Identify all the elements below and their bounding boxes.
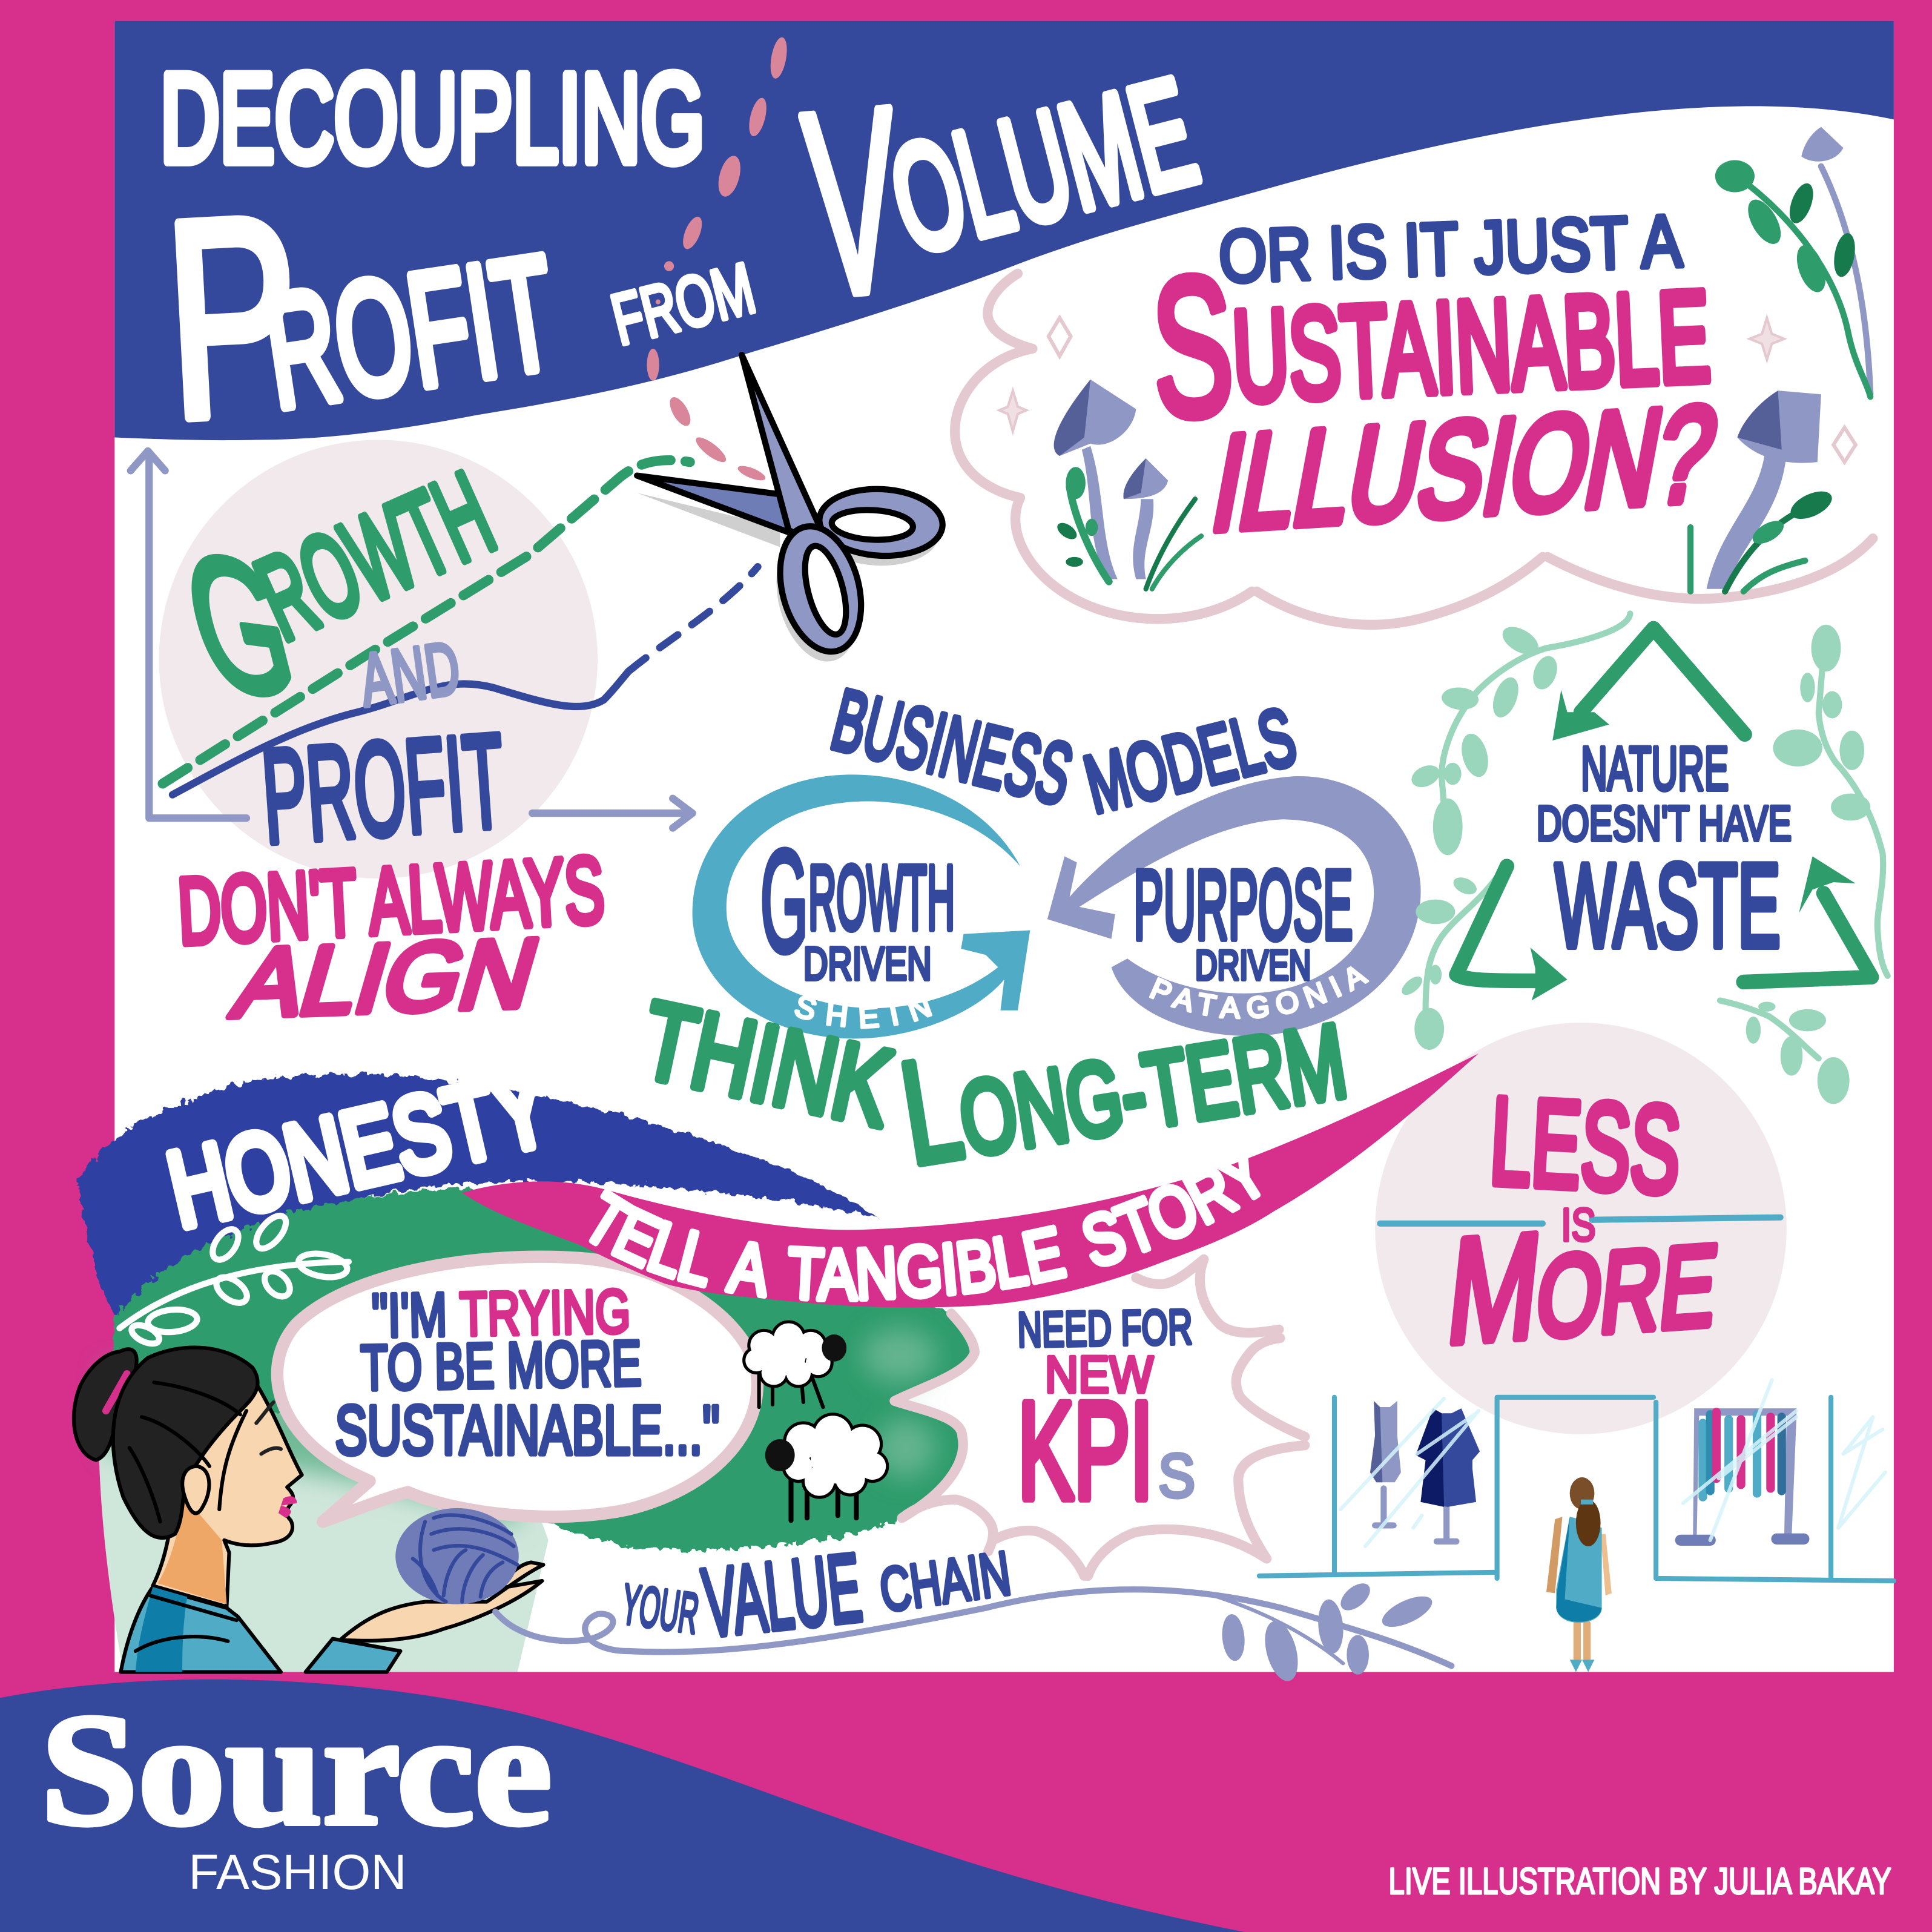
value chain thread and text — [495, 1533, 1451, 1684]
upper blade — [742, 355, 820, 537]
title text: from: FROM — [604, 248, 762, 360]
white sprig — [119, 1211, 349, 1347]
lower blade — [637, 476, 801, 532]
title text: profit: P — [159, 157, 306, 478]
ear — [182, 1466, 209, 1513]
business models heading — [823, 671, 1304, 830]
shopper figure — [1546, 1477, 1612, 1672]
title text: profit: ROFIT — [255, 223, 566, 442]
cloud outline — [955, 274, 1873, 625]
top-right plant and mushroom — [1715, 127, 1870, 397]
white main panel — [114, 21, 1894, 1672]
text: s: S — [1158, 1442, 1195, 1511]
speech text line 1: "I'M TRYING — [371, 1277, 631, 1350]
purpose-driven loop: PURPOSE — [1133, 851, 1353, 960]
text: chain: CHAIN — [875, 1538, 1015, 1625]
mannequin: fitted dress — [1370, 1401, 1401, 1525]
grass left — [1055, 467, 1201, 589]
blue top — [120, 1587, 281, 1672]
speech text line 2: TO BE MORE — [360, 1327, 642, 1404]
text: or is it just a: OR IS IT JUST A — [1218, 199, 1684, 298]
title text: decoupling: DECOUPLING — [160, 48, 705, 188]
tell a tangible story ribbon — [462, 1053, 1479, 1308]
neck and face — [153, 1377, 302, 1607]
left handle — [767, 517, 874, 661]
text: illusion?: ILLUSION? — [1202, 378, 1727, 559]
text: models: MODELS — [1076, 691, 1304, 830]
text: long-term: LONG-TERM — [891, 965, 1355, 1195]
value chain thread and text: YOUR — [618, 1572, 702, 1646]
text: driven: DRIVEN — [1195, 941, 1311, 989]
text: sustainable: S — [1148, 235, 1237, 459]
ribbon text: TELL A TANGIBLE STORY — [589, 1158, 1261, 1302]
text: think: THINK — [632, 978, 902, 1149]
speech text line 3: SUSTAINABLE..." — [335, 1392, 719, 1469]
hair strands — [130, 1382, 246, 1522]
text: new: NEW — [1045, 1347, 1153, 1404]
glass reflections — [1340, 1380, 1885, 1546]
text: need for: NEED FOR — [1017, 1299, 1193, 1357]
honesty text: HONESTY — [159, 1048, 559, 1250]
wordmark: source: Source — [41, 1681, 552, 1859]
footer wave — [0, 1680, 1244, 1932]
woman with yarn — [74, 1348, 543, 1672]
yarn ball — [395, 1508, 519, 1604]
mushroom large left — [1054, 380, 1136, 579]
text: value: VALUE — [698, 1533, 866, 1657]
lavender swoosh arrow — [1047, 776, 1421, 1036]
wordmark: fashion: FASHION — [188, 1845, 407, 1900]
sparkles — [999, 318, 1856, 462]
green recycle arrows — [1456, 628, 1871, 1000]
text: business: BUSINESS — [823, 671, 1081, 823]
title text: volume: V — [795, 53, 912, 351]
text: more: MORE — [1441, 1190, 1726, 1375]
sheep — [745, 1324, 886, 1520]
need for new kpis burst bubble — [894, 1259, 1305, 1576]
arrow to business models — [532, 799, 693, 828]
text: shein: SHEIN — [794, 995, 932, 1029]
source fashion logo — [41, 1681, 552, 1900]
mushroom small left — [1123, 458, 1168, 579]
profit dashed extension — [628, 567, 758, 671]
word: profit: PROFIT — [258, 706, 509, 871]
title text: volume — [795, 47, 1211, 351]
profit curve — [173, 671, 628, 795]
sleeve — [306, 1639, 400, 1672]
word: growth: G — [126, 470, 362, 752]
hair bun — [74, 1349, 137, 1460]
cut line: pink dashes — [647, 36, 790, 483]
leaves on thread — [1201, 1578, 1436, 1684]
hair — [113, 1348, 258, 1538]
teal swoosh arrow — [693, 774, 1030, 1038]
text: kpi: KPI — [1018, 1374, 1153, 1528]
mushroom large right — [1707, 391, 1821, 589]
title banner — [114, 21, 1894, 478]
text: is: IS — [1561, 1199, 1595, 1251]
growth-driven loop: ROWTH — [808, 846, 955, 948]
chart axes — [131, 451, 246, 818]
text: nature: NATURE — [1581, 734, 1729, 803]
growth dashed line — [163, 460, 690, 783]
thought cloud: sustainable illusion — [955, 199, 1873, 625]
divider lines — [1380, 1218, 1781, 1224]
mid green fade — [105, 1368, 518, 1528]
mannequin: navy dress — [1416, 1408, 1480, 1541]
clothing rack — [1681, 1408, 1804, 1540]
pale mottled patches — [863, 1328, 937, 1477]
grass right — [1690, 486, 1836, 592]
word: and: AND — [355, 626, 464, 722]
hair tie — [106, 1374, 127, 1411]
speech bubble — [277, 1257, 757, 1522]
store structure lines — [1259, 1397, 1894, 1581]
right handle — [818, 486, 945, 559]
less is more circle — [1375, 1023, 1787, 1434]
sheep top — [745, 1324, 846, 1407]
skin shadow — [157, 1497, 226, 1604]
text: less: LESS — [1487, 1072, 1684, 1219]
text: growth: G — [760, 820, 808, 982]
word: align: ALIGN — [223, 918, 550, 1037]
saturated green wash — [113, 1189, 975, 1551]
chart background circle — [159, 440, 598, 879]
word: don't always: DON'T ALWAYS — [176, 837, 607, 964]
sheep bottom — [765, 1416, 886, 1520]
honesty brush stroke — [76, 1048, 877, 1321]
think long-term — [632, 965, 1355, 1195]
nature doesn't have waste: recycle triangle — [1399, 613, 1888, 1104]
text: patagonia: PATAGONIA — [1149, 966, 1370, 1020]
yarn thread — [495, 1589, 1451, 1666]
growth and profit chart — [126, 394, 758, 1037]
pale green wash — [99, 1445, 549, 1672]
text: driven: DRIVEN — [803, 938, 932, 990]
purpose-driven loop — [1047, 765, 1440, 1061]
word: growth: ROWTH — [239, 447, 511, 665]
text: doesn't have: DOESN'T HAVE — [1537, 796, 1792, 851]
scissors icon — [637, 355, 945, 671]
scissors shadow — [637, 493, 940, 671]
store front — [1259, 1380, 1894, 1672]
eye and lips — [256, 1402, 281, 1454]
hand — [340, 1562, 543, 1641]
title text: profit — [159, 157, 566, 478]
growth-driven loop — [670, 774, 1047, 1039]
pale green vines — [1399, 613, 1888, 1104]
green meadow — [99, 1189, 975, 1672]
